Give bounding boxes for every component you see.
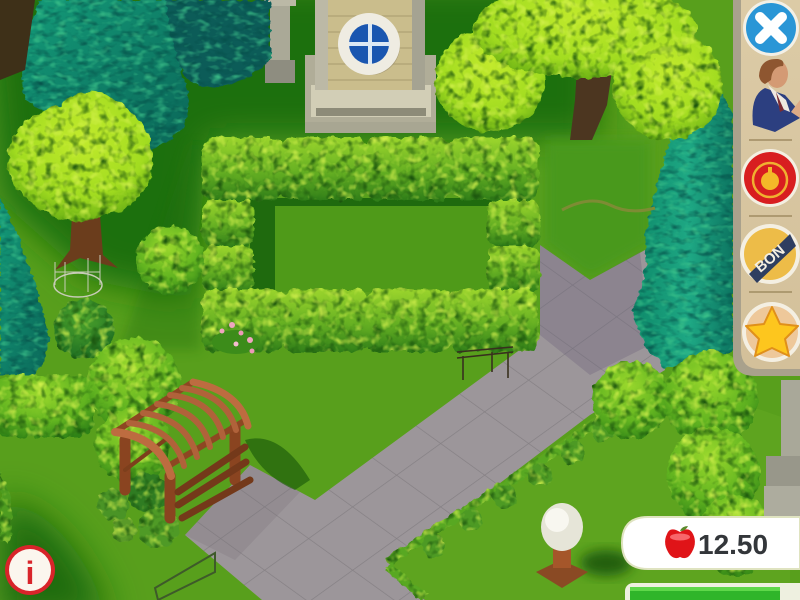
divider — [749, 291, 792, 293]
garden bench — [457, 347, 513, 380]
dark tree trunk top left — [0, 0, 35, 80]
round bushes — [0, 226, 776, 575]
side menu panel — [733, 0, 800, 376]
teal conifer top left — [22, 0, 189, 150]
wildflowers — [562, 201, 655, 211]
progress bar — [625, 583, 800, 600]
wire fence — [155, 553, 215, 600]
divider — [749, 139, 792, 141]
lime tree left — [8, 91, 153, 297]
building pedestal with round window — [305, 0, 436, 133]
apple counter — [622, 517, 800, 569]
close button — [743, 0, 799, 56]
yellow ribbon badge: BON — [752, 242, 788, 276]
lower right lawn — [388, 375, 790, 600]
hedge shadow — [120, 145, 200, 350]
man in suit portrait — [752, 59, 800, 132]
flower shrubs under trellis — [97, 472, 178, 548]
info button: i — [26, 555, 34, 591]
currency amount: 12.50 — [698, 529, 768, 560]
star button — [742, 302, 800, 362]
right stone column — [764, 380, 800, 518]
hedge inner lawn — [250, 198, 492, 292]
stone path — [185, 245, 665, 600]
rectangular hedge — [202, 137, 540, 352]
hedge blocks — [202, 137, 540, 352]
icon: apple — [665, 526, 695, 558]
ornamental lamp — [536, 503, 588, 588]
red medal button — [741, 149, 799, 207]
info button — [5, 545, 55, 595]
teal conifer left edge — [0, 195, 49, 375]
pink flowers — [212, 322, 260, 354]
divider — [749, 215, 792, 217]
right teal conifer — [633, 88, 733, 368]
dark teal conifer top centre — [165, 0, 270, 87]
wooden trellis — [115, 382, 250, 518]
yellow ribbon badge — [740, 224, 800, 284]
stone column — [264, 0, 296, 83]
lamp shadow — [580, 550, 632, 576]
trellis shadow — [245, 438, 310, 490]
lime tree cluster top right — [435, 0, 723, 140]
low hedge border — [388, 418, 615, 598]
